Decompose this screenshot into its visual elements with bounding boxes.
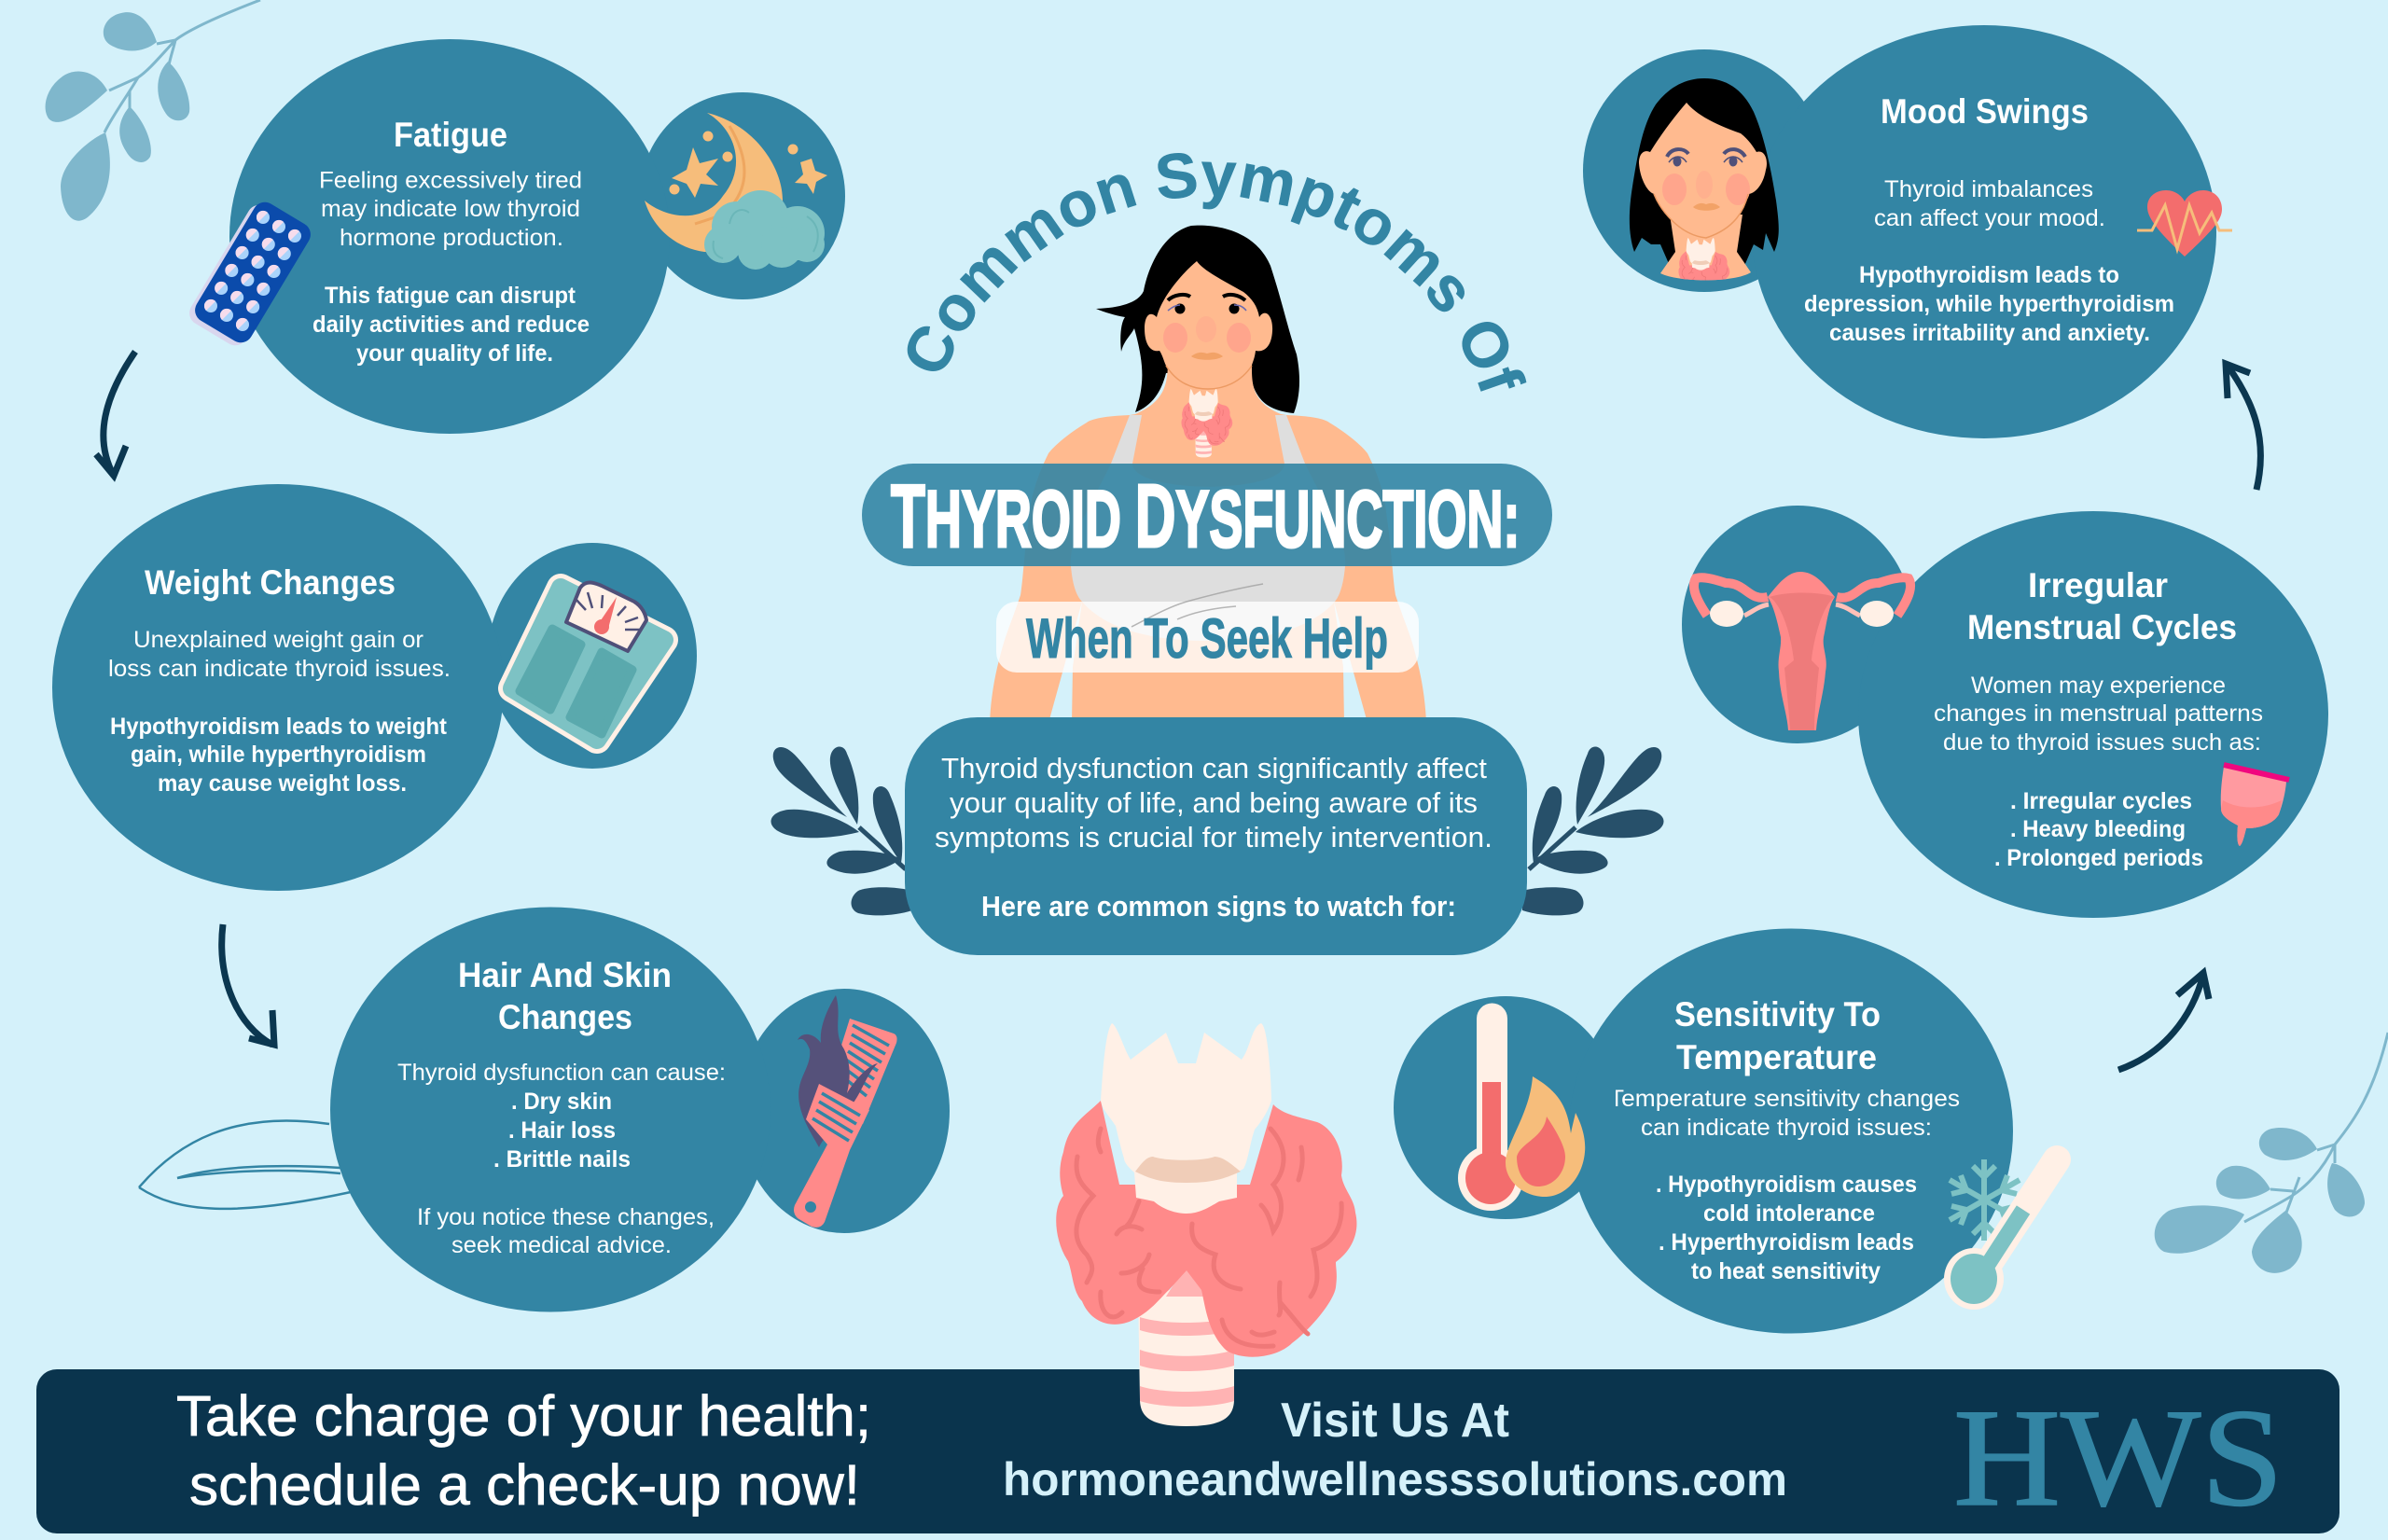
icon: menstrual cup — [2221, 765, 2289, 846]
illustration: thyroid gland and trachea — [1056, 1023, 1356, 1426]
icon: uterus — [1694, 572, 1910, 730]
text: visit us: Visit Us At — [1281, 1394, 1509, 1448]
circle: hair bubble — [330, 907, 771, 1311]
text: fatigue description: may indicate low thyroid — [321, 196, 580, 222]
text: call to action: schedule a check-up now! — [189, 1453, 860, 1517]
text: weight description: gain, while hyperthyroidism — [131, 742, 426, 768]
icon: snowflake — [1950, 1159, 2020, 1241]
text: temperature description: . Hyperthyroidism leads — [1659, 1229, 1914, 1256]
circle: mood icon bubble — [1583, 49, 1826, 292]
text: hair description: . Hair loss — [508, 1117, 616, 1144]
icon: pill blister pack — [185, 198, 315, 350]
text: mood description: Hypothyroidism leads to — [1859, 262, 2119, 288]
panel: introduction — [905, 717, 1527, 955]
text: mood description: can affect your mood. — [1874, 205, 2105, 231]
text: hair description: . Brittle nails — [493, 1146, 631, 1172]
heading: sensitivity to temperature — [1674, 995, 1881, 1076]
text: mood description: depression, while hyperthyroidism — [1804, 291, 2174, 317]
heading: irregular menstrual cycles — [1967, 566, 2237, 646]
decorative leaves: top left — [46, 0, 260, 221]
text: call to action: Take charge of your health; — [176, 1384, 871, 1448]
panel: footer banner — [36, 1369, 2339, 1535]
text: fatigue description: This fatigue can disrupt — [325, 283, 576, 309]
heading: hair and skin changes: Changes — [498, 998, 632, 1036]
title pill: thyroid dysfunction: THYROID DYSFUNCTION: — [891, 465, 1520, 565]
text: menstrual description: . Prolonged periods — [1994, 845, 2203, 871]
text: temperature description: to heat sensitivity — [1691, 1258, 1881, 1284]
circle: menstrual icon bubble — [1682, 506, 1913, 743]
text: introduction: Thyroid dysfunction can significantly affect — [941, 752, 1487, 784]
icon: woman portrait — [1629, 78, 1779, 280]
icon: bathroom scale — [512, 582, 664, 740]
circle: fatigue icon bubble — [640, 92, 845, 299]
illustration: woman with thyroid — [990, 226, 1426, 723]
heading: irregular menstrual cycles: Menstrual Cycles — [1967, 608, 2237, 646]
circle: mood bubble — [1752, 25, 2216, 438]
text: menstrual description: due to thyroid issues such as: — [1943, 729, 2261, 756]
text: menstrual description: changes in menstrual patterns — [1934, 701, 2263, 727]
text: temperature description — [1603, 1084, 1960, 1284]
text: temperature description: Temperature sensitivity changes — [1609, 1086, 1960, 1112]
text: hair description: If you notice these changes, — [417, 1204, 715, 1230]
text: hair description — [397, 1060, 726, 1258]
text: introduction — [935, 752, 1492, 923]
text: introduction: symptoms is crucial for timely intervention. — [935, 821, 1492, 853]
circle: weight bubble — [52, 484, 504, 891]
text: mood description: causes irritability and anxiety. — [1829, 320, 2150, 346]
circle: weight icon bubble — [488, 543, 697, 769]
heading: mood swings: Mood Swings — [1881, 92, 2089, 131]
text: fatigue description: Feeling excessively tired — [319, 168, 582, 194]
text: temperature description: can indicate thyroid issues: — [1641, 1115, 1932, 1141]
heading: weight changes: Weight Changes — [145, 563, 396, 602]
arrow: weight to hair — [222, 924, 274, 1045]
circle: menstrual bubble — [1858, 511, 2328, 918]
subtitle pill: when to seek help: When To Seek Help — [1026, 607, 1388, 670]
text: weight description — [108, 627, 451, 797]
text: weight description: Hypothyroidism leads to weight — [110, 714, 448, 740]
circle: fatigue bubble — [229, 39, 670, 434]
heading: hair and skin changes — [458, 956, 672, 1036]
panel: fatigue — [185, 39, 845, 434]
arrow: fatigue to weight — [96, 352, 135, 476]
text: weight description: loss can indicate thyroid issues. — [108, 656, 451, 682]
decoration: right plant — [1522, 747, 1664, 915]
text: menstrual description: . Irregular cycles — [2010, 788, 2192, 814]
title: common symptoms of: Common Symptoms Of — [907, 153, 1526, 392]
icon: heart with pulse line — [2137, 190, 2232, 257]
arrow: temperature to menstrual — [2118, 973, 2209, 1070]
subtitle pill: when to seek help — [996, 584, 1419, 673]
heading: hair and skin changes: Hair And Skin — [458, 956, 672, 994]
text: fatigue description: your quality of life. — [356, 340, 553, 367]
text: hair description: Thyroid dysfunction can cause: — [397, 1060, 726, 1086]
decorative outline leaf — [139, 1120, 351, 1209]
text: fatigue description: daily activities and reduce — [312, 312, 590, 338]
heading: sensitivity to temperature: Temperature — [1676, 1038, 1877, 1076]
circle: temperature icon bubble — [1394, 996, 1617, 1219]
text: temperature description: . Hypothyroidism causes — [1656, 1172, 1917, 1198]
arm gaps — [1048, 602, 1368, 723]
woman face — [1145, 261, 1272, 389]
text: mood description — [1804, 176, 2174, 346]
circle: temperature bubble — [1569, 929, 2013, 1334]
arrow: menstrual to mood — [2226, 364, 2260, 490]
logo: HWS: HWS — [1953, 1380, 2284, 1535]
decorative leaves: bottom right — [2155, 1033, 2388, 1273]
text: weight description: Unexplained weight gain or — [133, 627, 423, 653]
heading: irregular menstrual cycles: Irregular — [2028, 566, 2168, 604]
panel: mood swings — [1583, 25, 2232, 438]
circle: hair icon bubble — [739, 989, 950, 1233]
icon: moon, stars and cloud — [645, 113, 827, 270]
text: fatigue description: hormone production. — [340, 225, 563, 251]
text: menstrual description: Women may experience — [1971, 673, 2226, 699]
woman hair — [1096, 226, 1299, 413]
woman body — [990, 359, 1426, 723]
text: menstrual description — [1934, 673, 2263, 871]
icon: cold thermometer — [1944, 1159, 2057, 1310]
panel: sensitivity to temperature — [1394, 929, 2057, 1334]
icon: hot thermometer and flame — [1458, 1004, 1585, 1211]
text: temperature description: cold intolerance — [1703, 1200, 1875, 1227]
text: introduction: Here are common signs to watch for: — [981, 890, 1456, 923]
heading: sensitivity to temperature: Sensitivity To — [1674, 995, 1881, 1034]
text: weight description: may cause weight loss. — [158, 770, 407, 797]
text: hair description: . Dry skin — [511, 1089, 612, 1115]
text: call to action — [176, 1384, 871, 1517]
icon: comb with hair — [794, 995, 897, 1228]
text: mood description: Thyroid imbalances — [1884, 176, 2093, 202]
panel: weight changes — [52, 484, 697, 891]
text: fatigue description — [312, 168, 590, 367]
heading: fatigue: Fatigue — [394, 116, 507, 154]
text: menstrual description: . Heavy bleeding — [2010, 816, 2186, 842]
text: hair description: seek medical advice. — [451, 1232, 672, 1258]
face details — [1163, 295, 1252, 389]
woman tank top — [1071, 415, 1345, 641]
text: introduction: your quality of life, and being aware of its — [950, 786, 1478, 819]
panel: hair and skin changes — [330, 907, 950, 1311]
decoration: left plant — [771, 747, 912, 915]
text: website url: hormoneandwellnesssolutions.com — [1003, 1453, 1787, 1505]
thyroid on neck — [1181, 389, 1232, 457]
panel: irregular menstrual cycles — [1682, 506, 2328, 918]
